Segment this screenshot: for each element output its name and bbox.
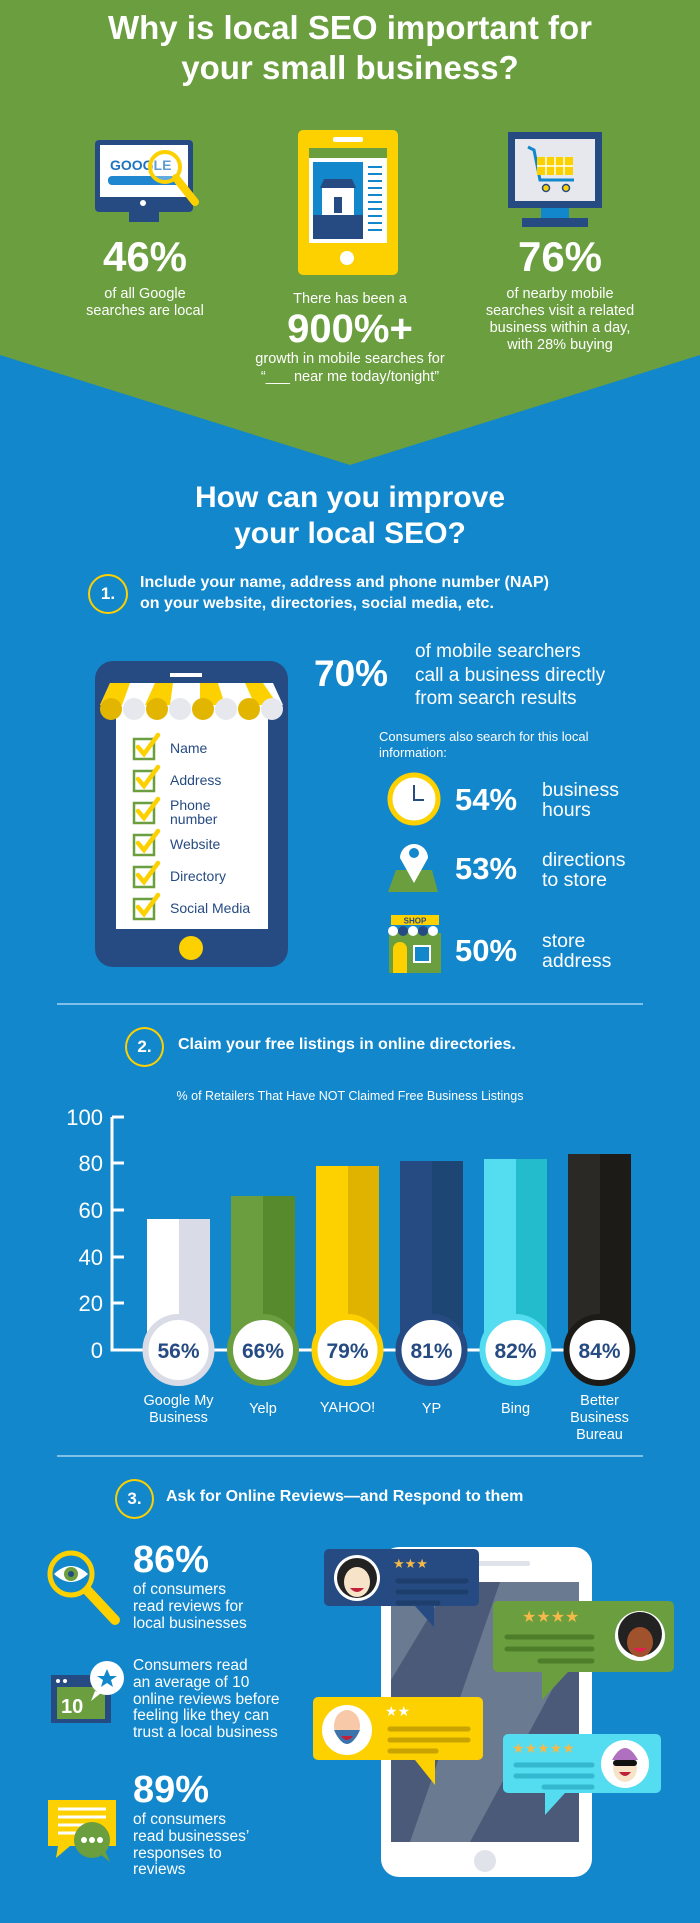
stat: 900%+ bbox=[255, 291, 445, 385]
stat: 76%: 76% bbox=[518, 233, 602, 280]
checklist items: Website bbox=[170, 836, 220, 852]
stat: 86% bbox=[133, 1539, 247, 1632]
bar chart: 80 bbox=[79, 1151, 103, 1176]
stat: 54% business hours: business bbox=[542, 779, 619, 801]
stat: 89%: reviews bbox=[133, 1861, 186, 1878]
text: consumers read average of 10: an average of 10 bbox=[133, 1674, 249, 1691]
checklist items: Name bbox=[170, 740, 207, 756]
stat: 46%: of all Google bbox=[104, 286, 186, 302]
checklist items: number bbox=[170, 811, 217, 827]
bubble yellow: ★★ bbox=[385, 1704, 410, 1720]
bar chart: Yelp bbox=[249, 1401, 277, 1417]
stat: 86%: of consumers bbox=[133, 1581, 226, 1598]
icon: magnifier with eye bbox=[48, 1550, 120, 1625]
stat: 53% directions: 53% bbox=[455, 851, 517, 886]
stat: 89%: 89% bbox=[133, 1769, 209, 1811]
stat: 86%: 86% bbox=[133, 1539, 209, 1581]
checklist items: Social Media bbox=[170, 900, 250, 916]
stat: 70%: of mobile searchers bbox=[415, 641, 581, 662]
bubble green: ★★★★ bbox=[522, 1607, 579, 1626]
stat: 89% bbox=[133, 1769, 249, 1878]
text: consumers read average of 10: trust a local business bbox=[133, 1724, 278, 1741]
step 2 heading bbox=[125, 1027, 516, 1067]
checklist items bbox=[132, 732, 250, 920]
stat: 70%: 70% bbox=[314, 653, 388, 694]
number circle 1 bbox=[88, 574, 128, 614]
step 3 heading bbox=[115, 1479, 523, 1519]
stat: 76% bbox=[486, 233, 634, 353]
text: consumers read average of 10: Consumers read bbox=[133, 1657, 248, 1674]
bar chart: Business bbox=[149, 1410, 208, 1426]
bar chart: Bureau bbox=[576, 1427, 623, 1443]
bar chart: Google My bbox=[143, 1393, 214, 1409]
green header background bbox=[0, 0, 700, 465]
text: consumers also search bbox=[379, 729, 589, 760]
stat: 76%: searches visit a related bbox=[486, 303, 634, 319]
stat: 86%: local businesses bbox=[133, 1615, 247, 1632]
text: consumers also search: Consumers also search for this local bbox=[379, 729, 589, 744]
checklist items: Address bbox=[170, 772, 221, 788]
stat: 50% store address: 50% bbox=[455, 933, 517, 968]
text: consumers read average of 10: online reviews before bbox=[133, 1691, 279, 1708]
step 2 heading: Claim your free listings in online directories. bbox=[178, 1036, 516, 1053]
chart caption: % of Retailers That Have NOT Claimed Free Business Listings bbox=[177, 1089, 523, 1103]
stat: 76%: of nearby mobile bbox=[506, 286, 614, 302]
icon: chat bubbles bbox=[48, 1800, 116, 1862]
stat: 900%+: There has been a bbox=[293, 291, 407, 307]
bar chart: 0 bbox=[91, 1338, 103, 1363]
step 1 heading bbox=[88, 574, 549, 614]
bar chart: 20 bbox=[79, 1291, 103, 1316]
bar chart: 66% bbox=[242, 1340, 284, 1363]
stat: 53% directions: directions bbox=[542, 849, 625, 871]
section heading: how can you improve bbox=[195, 481, 505, 550]
stat: 70% bbox=[314, 641, 606, 709]
checklist items: Directory bbox=[170, 868, 226, 884]
stat: 76%: business within a day, bbox=[490, 320, 630, 336]
stat: 86%: read reviews for bbox=[133, 1598, 243, 1615]
number circle 3 bbox=[115, 1479, 154, 1519]
number circle 2 bbox=[125, 1027, 164, 1067]
bar chart: YP bbox=[422, 1401, 441, 1417]
stat: 54% business hours: hours bbox=[542, 799, 591, 821]
title: Why is local SEO important for bbox=[108, 9, 592, 46]
stat: 54% business hours bbox=[455, 779, 619, 821]
section heading: how can you improve: your local SEO? bbox=[234, 517, 466, 550]
stat: 54% business hours: 54% bbox=[455, 782, 517, 817]
stat: 900%+: 900%+ bbox=[287, 307, 413, 351]
bar chart bbox=[66, 1105, 636, 1443]
bar chart: 79% bbox=[326, 1340, 369, 1363]
stat: 50% store address bbox=[455, 930, 611, 972]
bubble yellow bbox=[313, 1697, 483, 1785]
step 3 heading: Ask for Online Reviews—and Respond to them bbox=[166, 1488, 523, 1505]
bar chart: Bing bbox=[501, 1401, 530, 1417]
stat: 89%: responses to bbox=[133, 1845, 222, 1862]
bubble cyan bbox=[503, 1734, 661, 1815]
bar chart: 100 bbox=[66, 1105, 103, 1130]
bar chart: YAHOO! bbox=[320, 1400, 375, 1416]
bubble cyan: ★★★★★ bbox=[512, 1741, 575, 1757]
bubble navy: ★★★ bbox=[393, 1557, 428, 1572]
icon: yellow phone with store bbox=[298, 130, 398, 275]
icon: shop: SHOP bbox=[404, 916, 427, 926]
stat: 50% store address: address bbox=[542, 950, 611, 972]
icon: monitor with google search bbox=[95, 140, 199, 222]
bar chart: 81% bbox=[410, 1340, 453, 1363]
bar chart: Better bbox=[580, 1393, 619, 1409]
stat: 70%: from search results bbox=[415, 688, 577, 709]
stat: 53% directions: to store bbox=[542, 869, 607, 891]
number circle 3: 3. bbox=[127, 1489, 142, 1508]
icon: map pin bbox=[388, 844, 438, 892]
stat: 76%: with 28% buying bbox=[507, 337, 613, 353]
text: consumers read average of 10 bbox=[133, 1657, 279, 1741]
step 1 heading: Include your name, address and phone number (NAP) bbox=[140, 574, 549, 591]
number circle 1: 1. bbox=[101, 584, 115, 603]
icon: monitor with google search: GOOGLE bbox=[110, 157, 171, 173]
checklist items: Phone bbox=[170, 797, 210, 813]
icon: monitor with cart bbox=[508, 132, 602, 227]
step 1 heading: on your website, directories, social media, etc. bbox=[140, 595, 494, 612]
section heading: how can you improve: How can you improve bbox=[195, 481, 505, 514]
bubble navy bbox=[324, 1549, 479, 1627]
stat: 50% store address: store bbox=[542, 930, 585, 952]
icon: calendar 10 with star: 10 bbox=[61, 1696, 83, 1718]
stat: 70%: call a business directly bbox=[415, 664, 605, 686]
stat: 89%: of consumers bbox=[133, 1811, 226, 1828]
icon: clock bbox=[388, 772, 440, 826]
bar chart: 40 bbox=[79, 1245, 103, 1270]
illustration: phone with review bubbles bbox=[313, 1547, 674, 1877]
bar chart: Business bbox=[570, 1410, 629, 1426]
stat: 900%+: growth in mobile searches for bbox=[255, 351, 445, 367]
stat: 46%: 46% bbox=[103, 233, 187, 280]
icon: phone with NAP checklist bbox=[95, 661, 288, 967]
bubble green bbox=[493, 1601, 674, 1700]
icon: shop bbox=[388, 915, 441, 973]
bar chart: 84% bbox=[578, 1340, 621, 1363]
stat: 53% directions bbox=[455, 849, 625, 891]
bar chart: 82% bbox=[494, 1340, 537, 1363]
stat: 46% bbox=[86, 233, 204, 319]
stat: 89%: read businesses’ bbox=[133, 1828, 249, 1845]
number circle 2: 2. bbox=[137, 1037, 152, 1056]
title: your small business? bbox=[181, 49, 519, 86]
bar chart: 60 bbox=[79, 1198, 103, 1223]
bar chart: 56% bbox=[157, 1340, 200, 1363]
text: consumers read average of 10: feeling like they can bbox=[133, 1707, 269, 1724]
text: consumers also search: information: bbox=[379, 745, 447, 760]
title bbox=[108, 9, 592, 86]
stat: 46%: searches are local bbox=[86, 303, 204, 319]
icon: calendar 10 with star bbox=[51, 1661, 124, 1723]
stat: 900%+: “___ near me today/tonight” bbox=[261, 369, 439, 385]
